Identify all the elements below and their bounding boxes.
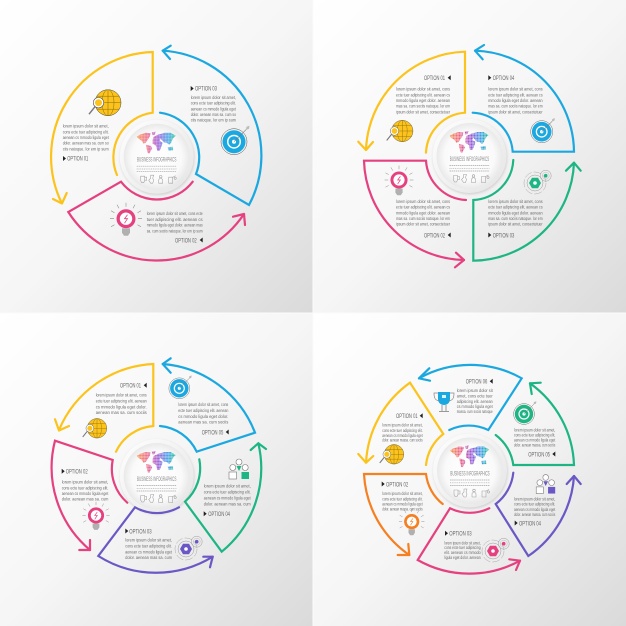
option 01 text: dolor. aenean massa. cum sociis (382, 438, 423, 443)
central hub (120, 120, 194, 195)
option 05 text: aenean cs mmodo ligula eget (514, 438, 556, 443)
option 04 text: aenean cs mmodo ligula eget (514, 507, 556, 512)
option 03 text: OPTION 03 (449, 531, 472, 538)
option 03 text: dolor. aenean mas sa. cum so (191, 112, 236, 117)
option 03 text: elit. aenean cs mmodo (444, 550, 481, 555)
option 06 text: cs mmodo ligula eget (457, 404, 493, 409)
option 01 text: ecte tuer adipiscing elit. aenean (96, 398, 147, 403)
central hub: BUSINESS INFOGRAPHICS (137, 156, 176, 164)
option 04 text: OPTION 04 (519, 520, 541, 527)
option 02 text: cons ecte tuer adipiscing elit. (382, 496, 423, 501)
icon: target (169, 376, 192, 399)
panel: six options (314, 314, 626, 626)
option 04 text: dolor. aenean massa. cum sociis (514, 512, 556, 517)
option 01 text: OPTION 01 (424, 75, 445, 82)
option 05 text: cs mmodo ligula eget dolor. (178, 414, 228, 419)
panel: four options (314, 0, 626, 312)
option 02 text: dolor. aenean mas sa. cum (62, 497, 109, 502)
option 03 text: cons ecte tuer adipiscing elit. (191, 101, 236, 106)
option 01 text: aenean cs mmodo ligula eget (382, 433, 423, 438)
option 04 text: cons ecte tuer adipiscing elit. (204, 490, 251, 495)
icon: globe (89, 90, 121, 116)
panel background bottom right (314, 314, 626, 626)
option 02 text: lorem ipsum dolor sit amet, cons ecte (147, 211, 203, 216)
option 05 text: aenean mas sa. cum sociis (178, 420, 229, 425)
icon: target (531, 118, 555, 143)
option 04 text: OPTION 04 (493, 75, 514, 82)
yellow arrow (55, 364, 153, 452)
option 03 text: dolor. aenean mas sa. cum (125, 555, 172, 560)
option 01 text (382, 413, 423, 443)
blue arrow (473, 45, 574, 152)
option 01 text: lorem ipsum dolor sit amet, (382, 423, 423, 428)
option 03 text: lorem ipsum dolor sit amet, (444, 540, 481, 545)
option 02 text: lorem ipsum dolor sit amet, (62, 480, 108, 485)
option 02 text: OPTION 02 (386, 481, 408, 488)
option 01 text: aenean cs mmodo ligula eget (63, 135, 109, 140)
option 03 text: aenean cs mmodo ligula eget (191, 106, 237, 111)
option 01 text: mas sa. cum sociis natoque. lor em (396, 104, 450, 109)
option 01 text (396, 75, 451, 114)
option 02 text: tuer adipiscing elit. aenean cs (147, 217, 203, 222)
option 03 text: ciis natoque. lor em ip sum (191, 118, 236, 123)
icon: gears (524, 170, 551, 194)
option 05 text (178, 402, 229, 436)
option 04 text (488, 75, 543, 114)
option 05 text: cons ecte tuer adipiscing elit. (514, 433, 555, 438)
option 01 text: ecte tuer adipiscing elit. aenean cs (396, 92, 451, 97)
option 03 text: ipsum dolor sit amet, consectetuer (488, 222, 543, 227)
option 04 text: lorem ipsum dolor sit amet, (514, 497, 555, 502)
option 03 text (444, 531, 481, 560)
option 03 text: OPTION 03 (493, 232, 514, 239)
icon: people (536, 475, 555, 494)
icon: target (221, 126, 250, 155)
option 01 text: lorem ipsum dolor sit amet, (63, 124, 109, 129)
icon: people (229, 459, 249, 479)
option 02 text: OPTION 02 (175, 237, 197, 244)
option 05 text: lorem ipsum dolor sit amet, (514, 428, 555, 433)
option 01 text: ipsum dolor sit amet, consectetuer (396, 109, 450, 114)
central hub: BUSINESS INFOGRAPHICS (137, 476, 176, 483)
option 02 text: mas sa. cum sociis natoque. lor em (396, 216, 450, 221)
icon: bulb (399, 509, 424, 535)
pink arrow (68, 182, 245, 261)
option 03 text (488, 199, 543, 239)
central hub (433, 434, 508, 509)
option 03 text: mmodo ligula eget dolor. aenean (488, 210, 543, 215)
option 04 text (514, 497, 556, 527)
blue arrow (160, 46, 261, 205)
green arrow (473, 160, 581, 261)
option 02 text: dolor. aenean massa. cum sociis (382, 506, 423, 511)
option 03 text: OPTION 03 (195, 86, 217, 93)
panel background top left (0, 0, 312, 312)
icon: globe (380, 445, 404, 464)
option 05 text: ecte tuer adipiscing elit. aenean (178, 408, 229, 413)
option 01 text: lorem ipsum dolor sit amet, cons (96, 392, 147, 397)
option 02 text: aenean cs mmodo ligula eget (382, 501, 423, 506)
option 04 text: dolor. aenean mas sa. cum (204, 501, 251, 506)
option 04 text: mmodo ligula eget dolor. aenean (488, 98, 543, 103)
panel: five options (0, 314, 312, 626)
option 05 text: OPTION 05 (202, 429, 223, 436)
option 01 text: mmodo ligula eget dolor. aenean (396, 98, 450, 103)
option 02 text (396, 199, 451, 239)
option 01 text: ciis natoque. lor em ip sum (63, 146, 109, 151)
central hub (120, 439, 194, 514)
icon: gears (175, 536, 202, 560)
option 03 text: OPTION 03 (129, 528, 152, 535)
option 06 text: adipiscing elit. aenean (457, 399, 493, 404)
green arrow (185, 443, 266, 552)
option 02 text: OPTION 02 (66, 469, 88, 476)
option 02 text (382, 481, 423, 511)
option 05 text: lorem ipsum dolor sit amet, cons (178, 402, 229, 407)
option 02 text: OPTION 02 (424, 232, 445, 239)
icon: globe (83, 419, 107, 438)
icon: target (514, 401, 536, 424)
option 01 text: OPTION 01 (120, 383, 141, 390)
blue arrow (419, 365, 522, 430)
yellow arrow (51, 52, 153, 204)
option 01 text: aenean mas sa. cum sociis (96, 410, 147, 415)
panel background bottom left (0, 314, 312, 626)
option 03 text (125, 528, 173, 560)
option 05 text: OPTION 05 (528, 451, 550, 458)
option 04 text: lorem ipsum dolor sit amet, cons (488, 87, 543, 92)
option 03 text (191, 86, 237, 123)
option 04 text: ipsum dolor sit amet, consectetuer (488, 109, 543, 114)
central hub: BUSINESS INFOGRAPHICS (450, 156, 489, 163)
option 04 text: ecte tuer adipiscing elit. aenean cs (488, 92, 543, 97)
option 06 text (457, 379, 493, 414)
option 02 text: mmodo ligula eget dolor. aenean mas (147, 223, 203, 228)
option 05 text (514, 428, 556, 458)
option 04 text: OPTION 04 (208, 511, 230, 518)
option 06 text: massa. cum sociis natoque (457, 409, 493, 414)
panel background top right (314, 0, 626, 312)
option 02 text: aenean cs mmodo ligula eget (62, 491, 109, 496)
option 02 text: lorem ipsum dolor sit amet, (382, 491, 423, 496)
option 01 text: cs mmodo ligula eget dolor. (96, 404, 147, 409)
option 02 text: ipsum dolor sit amet, consectetuer (396, 222, 450, 227)
pink arrow (364, 161, 466, 267)
option 02 text: ecte tuer adipiscing elit. aenean cs (396, 205, 451, 210)
pink arrow (52, 441, 127, 550)
option 01 text: OPTION 01 (396, 413, 418, 420)
icon: bulb (82, 502, 110, 530)
option 03 text: cons ecte tuer adipiscing (444, 545, 481, 550)
option 04 text (204, 484, 251, 518)
green arrow (496, 383, 574, 465)
option 01 text (96, 383, 147, 415)
option 01 text: lorem ipsum dolor sit amet, cons (396, 87, 451, 92)
yellow arrow (358, 383, 443, 465)
option 01 text (63, 124, 109, 163)
option 03 text: lorem ipsum dolor sit amet, cons (488, 199, 543, 204)
option 03 text: ligula eget dolor. aenean (444, 555, 481, 560)
option 01 text: cons ecte tuer adipiscing elit. (382, 428, 423, 433)
central hub: BUSINESS INFOGRAPHICS (450, 470, 490, 477)
option 03 text: aenean cs mmodo ligula eget (125, 549, 173, 554)
icon: gears (482, 538, 509, 562)
option 06 text: amet, cons ecte tuer (457, 394, 493, 399)
icon: bulb (110, 203, 142, 236)
option 04 text: mas sa. cum sociis natoque. lor em (488, 104, 543, 109)
option 02 text (62, 469, 109, 502)
option 05 text: dolor. aenean massa. cum sociis (514, 443, 556, 448)
orange arrow (364, 474, 443, 555)
purple arrow (98, 507, 213, 573)
yellow arrow (358, 52, 465, 153)
option 02 text: sa. cum sociis natoque. lor em ip sum (147, 228, 203, 233)
option 03 text: lorem ipsum dolor sit amet, (191, 95, 236, 100)
option 06 text: lorem ipsum dolor sit (457, 388, 493, 393)
option 03 text: cons ecte tuer adipiscing elit. (125, 544, 172, 549)
blue arrow (160, 358, 255, 452)
option 04 text: aenean cs mmodo ligula eget (204, 495, 251, 500)
option 03 text: lorem ipsum dolor sit amet, (125, 538, 172, 543)
purple arrow (496, 473, 581, 556)
option 03 text: ecte tuer adipiscing elit. aenean cs (488, 205, 543, 210)
central hub (432, 119, 507, 194)
option 03 text: mas sa. cum sociis natoque. lor em (488, 216, 543, 221)
option 02 text (147, 211, 203, 244)
option 02 text: lorem ipsum dolor sit amet, cons (396, 199, 451, 204)
option 06 text: OPTION 06 (466, 379, 487, 386)
option 02 text: mmodo ligula eget dolor. aenean (396, 210, 450, 215)
pink arrow (418, 508, 520, 574)
option 01 text: dolor. aenean mas sa. cum so (63, 141, 109, 146)
icon: trophy (434, 392, 454, 412)
panel: three options (0, 0, 312, 312)
icon: globe (387, 120, 413, 142)
option 01 text: OPTION 01 (67, 156, 88, 163)
option 01 text: cons ecte tuer adipiscing elit. (63, 129, 109, 134)
option 02 text: cons ecte tuer adipiscing elit. (62, 485, 108, 490)
option 04 text: lorem ipsum dolor sit amet, (204, 484, 251, 489)
option 04 text: cons ecte tuer adipiscing elit. (514, 502, 555, 507)
icon: bulb (385, 166, 413, 195)
